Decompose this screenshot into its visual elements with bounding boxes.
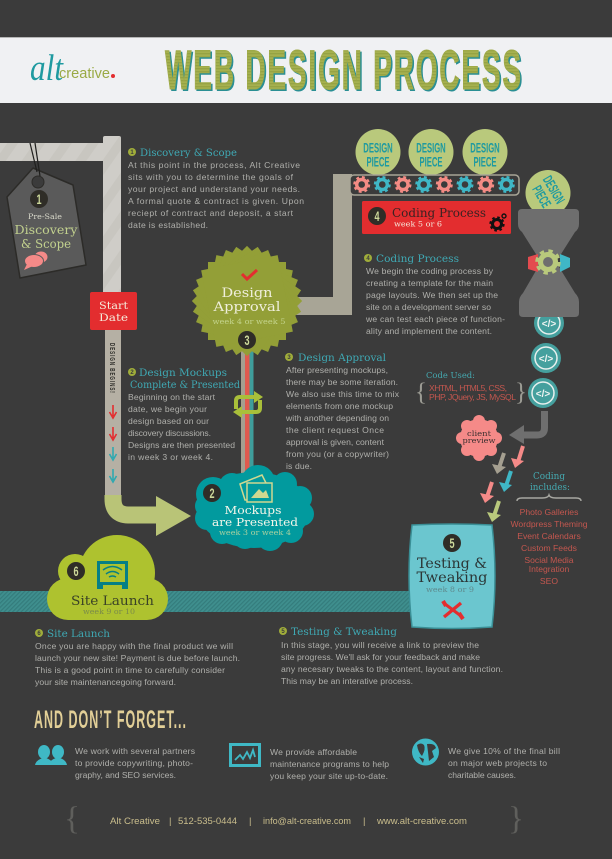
tag: discovery and scope	[7, 143, 86, 278]
cloud: mockups are presented	[195, 465, 314, 551]
text: design mockups: date, we begin your	[128, 404, 207, 414]
text: design mockups	[128, 368, 241, 462]
footer contact line: |	[169, 816, 171, 827]
text: design approval: from you (or a copywriter)	[286, 449, 389, 459]
tag: discovery and scope: 1	[36, 191, 42, 208]
text: site launch	[35, 629, 240, 687]
footer contact line: info@alt-creative.com	[263, 816, 351, 827]
title: WEB DESIGN PROCESS	[166, 41, 523, 103]
footer contact line	[64, 801, 524, 837]
text: discovery and scope: A formal quote & contract is given. Upon	[128, 196, 304, 206]
box: coding process: 4	[374, 208, 380, 225]
item: partners: We work with several partners	[75, 746, 195, 756]
text: design mockups: Beginning on the start	[128, 392, 216, 402]
icon: globe	[412, 738, 439, 766]
text: code used: Code Used:	[426, 371, 475, 381]
arrow: pink 2	[480, 482, 494, 503]
text: design approval: there may be some iteration.	[286, 377, 398, 387]
design piece circles: DESIGN	[416, 141, 446, 156]
item: partners: to provide copywriting, photo-	[75, 758, 193, 768]
header band	[0, 37, 612, 103]
text: design approval: We also use this time to mix	[286, 389, 400, 399]
item: partners	[35, 745, 195, 780]
item: charity: on major web projects to	[448, 758, 547, 768]
text: coding includes: Integration	[529, 564, 570, 574]
text: discovery and scope: Discovery & Scope	[140, 148, 237, 159]
tag: discovery and scope: & Scope	[21, 236, 71, 251]
logo	[30, 48, 115, 89]
text: coding process: site on a development server so	[366, 302, 491, 312]
text: coding process: page layouts. We then set up the	[366, 290, 498, 300]
item: partners: graphy, and SEO services.	[75, 770, 176, 780]
badge: design approval: Approval	[212, 300, 280, 315]
text: discovery and scope: sits with you to determine the goals of	[128, 172, 294, 182]
text: coding process: We begin the coding process by	[366, 266, 494, 276]
heading: and don't forget: AND DON’T FORGET...	[34, 706, 186, 734]
text: design mockups: Complete & Presented	[130, 380, 241, 391]
text: design approval: is due.	[286, 461, 312, 471]
cloud: mockups are presented: week 3 or week 4	[219, 528, 291, 537]
title: WEB DESIGN PROCESS	[165, 40, 521, 102]
text: site launch: Site Launch	[47, 629, 111, 640]
item: maintenance	[230, 744, 389, 781]
design piece circles: DESIGN	[470, 141, 500, 156]
item: charity	[412, 738, 560, 780]
text: coding process: 4	[366, 256, 370, 262]
text: discovery and scope: date is established.	[128, 220, 208, 230]
text: testing and tweaking: 5	[281, 629, 285, 635]
item: maintenance: maintenance programs to help	[270, 759, 389, 769]
text: code used: XHTML, HTML5, CSS,	[429, 383, 507, 393]
text: coding process: ality and implement the content.	[366, 326, 492, 336]
text: coding process	[364, 254, 505, 336]
small arrows	[110, 405, 116, 482]
box: coding process	[362, 201, 511, 234]
text: site launch: your site maintenancegoing forward.	[35, 677, 176, 687]
text: coding includes: Social Media	[524, 555, 574, 565]
icon: speech bubbles	[24, 252, 48, 270]
arrow: teal	[499, 471, 512, 492]
arrow: tan	[492, 453, 506, 474]
connector: coding to approval	[290, 174, 352, 315]
item: charity: We give 10% of the final bill	[448, 746, 560, 756]
teal band	[0, 591, 412, 612]
cloud: site launch: week 9 or 10	[83, 607, 135, 616]
text: site launch: 6	[37, 631, 41, 637]
icon: tools	[443, 601, 463, 619]
text: design approval: with another depending on	[285, 413, 389, 423]
code circles: </>	[539, 354, 553, 365]
footer contact line: 512-535-0444	[178, 816, 237, 827]
icon: screen wifi	[97, 561, 128, 589]
text: coding includes: Event Calendars	[517, 531, 581, 541]
path: design begins pipe	[105, 328, 121, 496]
badge: design approval	[192, 246, 302, 356]
text: design approval: approval is given, content	[286, 437, 385, 447]
icon: black gears	[491, 214, 506, 230]
rotated design piece: PIECE	[529, 183, 553, 211]
text: discovery and scope: reciept of contract and deposit, a start	[128, 208, 294, 218]
arrow: pink	[511, 446, 524, 468]
footer contact line: {	[64, 801, 80, 837]
text: design approval: the client request Once	[286, 425, 384, 435]
text: coding includes: Custom Feeds	[521, 543, 577, 553]
arrow: grey to client preview	[509, 411, 544, 444]
item: maintenance: We provide affordable	[270, 747, 357, 757]
icon: check	[242, 270, 257, 279]
box: testing and tweaking: week 8 or 9	[426, 585, 474, 594]
footer contact line: |	[363, 816, 365, 827]
tag: discovery and scope: Discovery	[14, 222, 78, 237]
design piece circles: DESIGN	[363, 141, 393, 156]
start date box: Date	[99, 312, 128, 324]
text: coding includes: Coding	[533, 472, 565, 482]
text: design approval: Design Approval	[298, 353, 386, 364]
box: testing and tweaking: Testing &	[417, 556, 487, 572]
cloud: site launch	[47, 535, 168, 620]
text: coding includes	[510, 472, 588, 586]
text: code used: }	[515, 379, 527, 406]
text: design approval: After presenting mockups,	[286, 365, 388, 375]
client preview badge	[456, 415, 502, 461]
start date box	[90, 292, 137, 330]
text: design mockups: design based on our	[128, 416, 209, 426]
box: testing and tweaking	[409, 524, 495, 628]
item: charity: charitable causes.	[448, 770, 516, 780]
text: discovery and scope	[128, 148, 304, 230]
text: testing and tweaking: Testing & Tweaking	[291, 627, 398, 638]
text: discovery and scope: your project and understand your needs.	[128, 184, 300, 194]
footer contact line: }	[508, 801, 524, 837]
client preview badge: client	[467, 429, 491, 438]
text: coding process: creating a template for the main	[366, 278, 493, 288]
text: site launch: Once you are happy with the final product we will	[35, 641, 233, 651]
arrow: green to mockups	[113, 495, 191, 536]
text: code used: PHP, JQuery, JS, MySQL	[429, 392, 516, 402]
icon: monitor chart	[230, 744, 260, 766]
footer contact line: Alt Creative	[110, 816, 160, 827]
text: design mockups: 2	[130, 370, 134, 376]
icon: pictures	[240, 475, 272, 502]
cloud: site launch: 6	[73, 563, 79, 580]
badge: design approval: Design	[222, 286, 273, 301]
text: site launch: launch your new site! Payment is due before launch.	[35, 653, 240, 663]
box: coding process: Coding Process	[392, 206, 486, 220]
cloud: site launch: Site Launch	[71, 594, 155, 609]
item: maintenance: you keep your site up-to-date.	[270, 771, 388, 781]
text: coding includes: Photo Galleries	[520, 507, 578, 517]
text: coding process: Coding Process	[376, 254, 459, 265]
text: design mockups: Designs are then presented	[128, 440, 235, 450]
code circles: </>	[542, 319, 556, 330]
cloud: mockups are presented: Mockups	[224, 503, 282, 517]
text: design mockups: Design Mockups	[139, 368, 227, 379]
client preview badge: preview	[462, 436, 496, 445]
code circles	[528, 308, 564, 408]
icon: recycle arrows	[233, 391, 263, 418]
arrow: green	[487, 501, 501, 522]
rotated design piece: DESIGN	[539, 174, 567, 207]
box: testing and tweaking: Tweaking	[416, 570, 488, 586]
logo: alt	[30, 48, 64, 89]
text: coding process: we can test each piece of function-	[365, 314, 505, 324]
text: coding includes: Wordpress Theming	[510, 519, 588, 529]
start date box: Start	[99, 300, 129, 312]
vertical label: DESIGN BEGINS!	[108, 343, 116, 393]
cloud: mockups are presented: are Presented	[212, 515, 299, 529]
design piece circles: PIECE	[473, 155, 497, 170]
text: code used: {	[415, 379, 427, 406]
stripes between approval and mockups	[241, 345, 254, 473]
conveyor belt with gears	[350, 175, 519, 195]
text: testing and tweaking: In this stage, you will receive a link to preview the	[281, 640, 479, 650]
box: coding process: week 5 or 6	[394, 220, 442, 228]
text: design approval: 3	[287, 355, 291, 361]
design piece circles	[356, 129, 508, 175]
text: testing and tweaking	[279, 627, 503, 686]
text: design mockups: discovery discussions.	[128, 428, 211, 438]
footer contact line: www.alt-creative.com	[376, 816, 467, 827]
footer contact line: |	[249, 816, 251, 827]
text: design mockups: in week 3 or week 4.	[128, 452, 213, 462]
badge: design approval: 3	[244, 332, 250, 349]
text: design approval	[285, 353, 400, 471]
logo: creative	[59, 65, 110, 82]
text: coding includes: SEO	[540, 576, 558, 586]
text: testing and tweaking: This may be an interative process.	[281, 676, 413, 686]
rotated design piece	[526, 170, 570, 216]
hourglass machine	[518, 209, 579, 317]
tag: discovery and scope: Pre-Sale	[28, 212, 63, 221]
icon: people	[35, 745, 67, 765]
design piece circles: PIECE	[366, 155, 390, 170]
box: testing and tweaking: 5	[449, 535, 455, 552]
gears in machine	[528, 252, 570, 272]
path: grey pipe from top-left	[0, 136, 121, 296]
small arrows to testing	[480, 446, 524, 522]
design piece circles: PIECE	[419, 155, 443, 170]
text: discovery and scope: At this point in the process, Alt Creative	[128, 160, 300, 170]
text: testing and tweaking: site progress. We'll ask for your feedback and make	[281, 652, 480, 662]
text: design approval: elements from one mockup	[286, 401, 393, 411]
text: discovery and scope: 1	[130, 150, 134, 156]
cloud: mockups are presented: 2	[209, 485, 215, 502]
text: site launch: This is a good point in time to carefully consider	[35, 665, 225, 675]
badge: design approval: week 4 or week 5	[212, 317, 286, 326]
text: testing and tweaking: any necesary tweaks to the content, layout and function.	[281, 664, 503, 674]
text: code used	[415, 371, 527, 406]
code circles: </>	[536, 389, 550, 400]
text: coding includes: includes:	[530, 483, 570, 493]
